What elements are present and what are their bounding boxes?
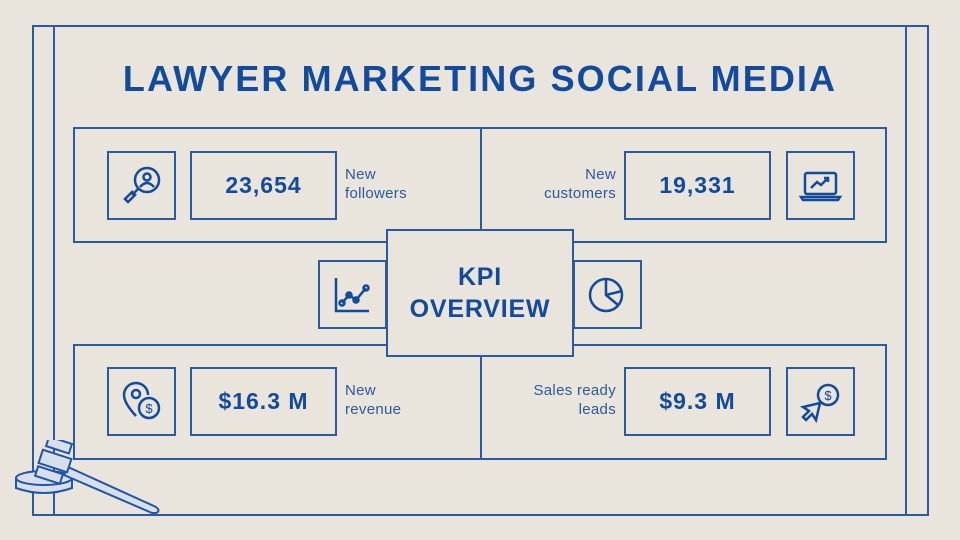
value: revenue	[190, 367, 337, 436]
center: KPI overview: OVERVIEW	[410, 295, 550, 323]
title: LAWYER MARKETING SOCIAL MEDIA	[123, 58, 837, 99]
value: followers: 23,654	[225, 172, 302, 198]
label: followers	[345, 166, 407, 202]
icon: cursor dollar: $	[824, 388, 832, 403]
label: customers	[544, 166, 616, 202]
icon: gavel	[15, 440, 160, 514]
label: leads: leads	[579, 401, 616, 418]
label: leads	[533, 382, 616, 418]
icon: location dollar	[107, 367, 176, 436]
label: customers: customers	[544, 185, 616, 202]
label: revenue: New	[345, 382, 376, 399]
value: followers	[190, 151, 337, 220]
label: followers: New	[345, 166, 376, 183]
label: revenue	[345, 382, 401, 418]
panel: bottom	[73, 344, 887, 460]
value: leads: $9.3 M	[659, 388, 736, 414]
label: revenue: revenue	[345, 401, 401, 418]
value: revenue: $16.3 M	[218, 388, 309, 414]
value: customers: 19,331	[659, 172, 736, 198]
value: leads	[624, 367, 771, 436]
icon: laptop	[786, 151, 855, 220]
label: followers: followers	[345, 185, 407, 202]
icon: location dollar: $	[145, 401, 153, 416]
label: customers: New	[585, 166, 616, 183]
icon: search user	[107, 151, 176, 220]
icon: pie chart	[573, 260, 642, 329]
panel: top	[73, 127, 887, 243]
label: leads: Sales ready	[533, 382, 616, 399]
center: KPI overview: KPI	[458, 263, 502, 291]
center: KPI overview	[386, 229, 574, 357]
icon: cursor dollar	[786, 367, 855, 436]
value: customers	[624, 151, 771, 220]
icon: line chart	[318, 260, 387, 329]
